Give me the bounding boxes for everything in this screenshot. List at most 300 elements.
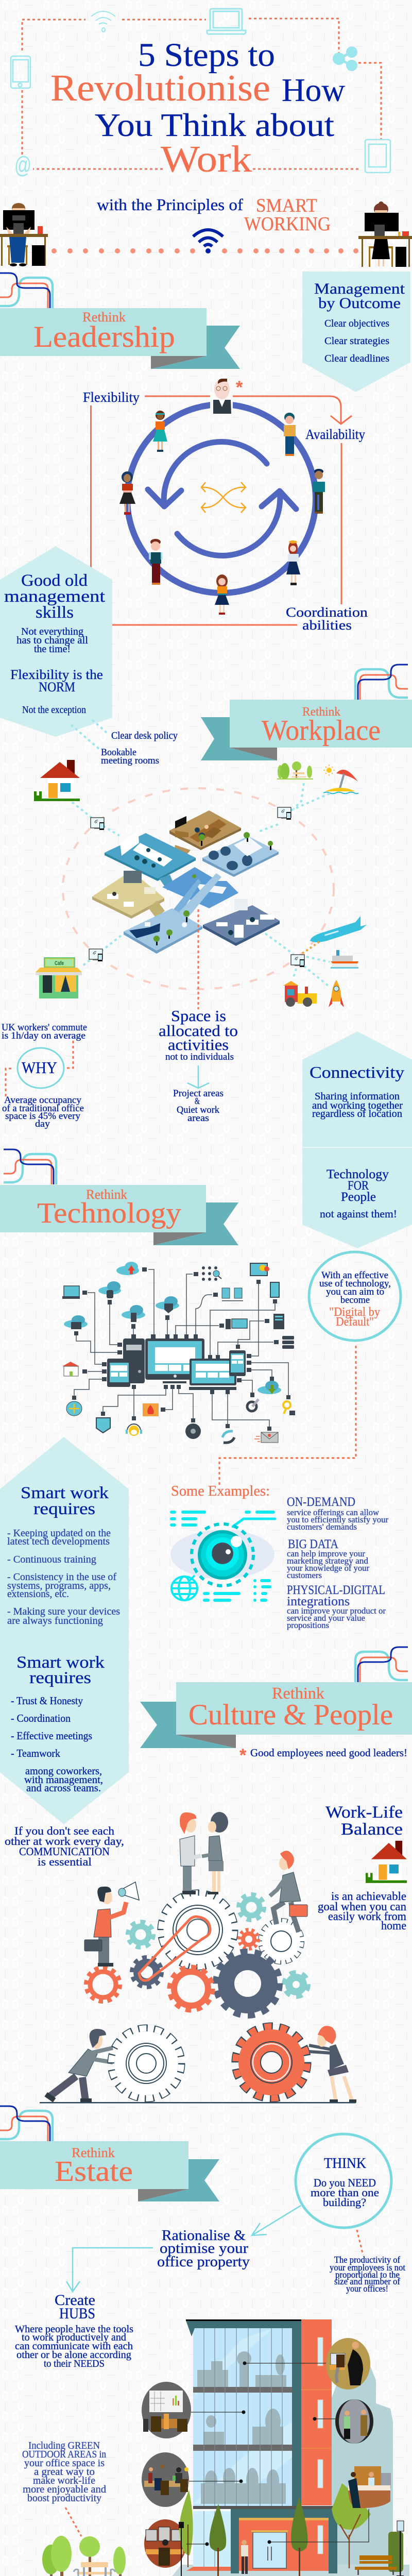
panel: smart work requires: and across teams. [26,1783,101,1794]
banner: Rethink Leadership: Rethink [82,310,126,325]
panel: good old management skills [0,546,112,737]
panel: connectivity: Technology [327,1167,389,1181]
panel: connectivity: and working together [312,1100,403,1111]
icon: small laptop [62,1286,80,1299]
icon: server stack [282,1336,294,1349]
examples text: ON-DEMAND [287,1495,355,1509]
icon: support headset [126,1424,142,1436]
text: green outdoor areas: more enjoyable and [23,2484,106,2495]
monitor node [291,955,304,967]
icon: wifi outline [91,11,115,32]
panel: smart work requires: Smart work [21,1484,109,1502]
text: green outdoor areas: make work-life [33,2475,95,2486]
leadership cycle diagram [83,378,368,633]
icon: monitor chat [250,1263,269,1276]
panel: smart work requires: requires [33,1500,95,1518]
banner: Rethink Technology [0,1185,238,1245]
scene: lift [335,2399,373,2444]
dashed connector to examples [219,1346,356,1485]
dashed ring around office [63,788,334,989]
text: green outdoor areas [22,2440,106,2504]
scene: security room [144,2519,186,2568]
text: create hubs: HUBS [59,2305,95,2322]
text: work-life balance: Work-Life [325,1803,403,1822]
decorative ribbon lines: technology [4,1149,56,1184]
team member: vest [149,539,162,585]
icon: search dots [202,1266,221,1281]
why circle: WHY [22,1058,57,1077]
labels [83,389,368,633]
icon: ship [331,950,358,969]
bench [74,2562,115,2576]
icon: cloud shield [156,1296,179,1313]
text: create hubs: Where people have the tools [15,2324,133,2335]
examples text: propositions [287,1620,329,1630]
dashed line from office to text [198,909,199,1009]
outer ring [127,404,316,593]
orange tower [301,2319,332,2505]
icon: toy train [283,981,317,1007]
icon: crossing arrows [201,482,246,513]
why connector [6,1041,73,1096]
examples text: service offerings can allow [287,1507,379,1517]
team member: red top [119,471,135,515]
text: achievable goal: goal when you can [318,1900,406,1913]
icon: cloud download [258,1381,281,1394]
header frame with device icons [11,9,390,178]
gear: pushed white [111,2028,181,2098]
panel: good old management skills: Not everything [21,626,83,637]
icon: phone right [270,1282,279,1297]
heading: space is allocated [159,1007,238,1062]
ground line [40,2102,356,2103]
banner: Rethink Estate: Estate [55,2156,133,2188]
team member: orange top [215,574,229,615]
arrow down [187,1065,209,1088]
panel: smart work requires: - Coordination [11,1712,71,1724]
labels: Availability [305,427,365,442]
gears illustration [40,1812,356,2103]
text: achievable goal [318,1890,406,1932]
decorative ribbon lines: culture [355,1647,408,1682]
heading: space is allocated: Space is [171,1007,226,1025]
panel: management by outcome [302,272,410,392]
heading: space is allocated: not to individuals [165,1052,234,1062]
oval: think: more than one [311,2186,379,2199]
activity list: Quiet work [177,1105,219,1115]
text: work-life balance [325,1803,403,1839]
text: communication: If you don't see each [14,1824,114,1837]
gear: pushed coral [235,2026,307,2098]
text: communication: is essential [38,1855,92,1868]
floor: lounge [202,832,279,877]
panel: smart work requires: - Continuous training [7,1554,96,1565]
icon: server [273,1314,284,1329]
text: green outdoor areas: boost productivity [27,2493,101,2504]
labels: abilities [302,618,352,633]
figure: pushing woman [309,2026,356,2103]
banner: Rethink Estate: Rethink [72,2145,115,2160]
labels: Flexibility [83,389,140,405]
note: good employees: Good employees need good leaders! [250,1747,407,1759]
cable plugs [72,1267,290,1431]
activity list [173,1088,224,1124]
panel: smart work requires: - Teamwork [11,1747,60,1759]
lamp posts [179,2521,404,2576]
text: productivity note [330,2255,405,2294]
inner rotation arrows [148,442,296,555]
text: achievable goal: is an achievable [331,1890,406,1903]
floor: central hall [162,867,238,920]
panel: management by outcome: by Outcome [318,295,401,312]
banner: Rethink Workplace: Workplace [262,715,381,747]
figure: handshake woman [202,1812,228,1894]
workplace notes [101,730,178,766]
commute fact: UK workers' commute [2,1022,87,1033]
tree: dark [210,2504,226,2551]
subtitle: SMART [256,195,317,216]
title: Work [161,138,252,180]
dashed connector [357,2230,363,2255]
dashed connector to park [65,2507,81,2536]
text: green outdoor areas: a great way to [34,2466,95,2478]
panel: connectivity: not against them! [320,1208,397,1220]
title: How [282,72,345,108]
monitor node [91,818,104,830]
office building illustration [142,2319,409,2576]
examples text: service and your value [287,1613,365,1623]
panel: smart work requires: - Making sure your devices [7,1606,120,1617]
floor bands [193,2387,292,2393]
back building [332,2366,393,2565]
gear: teal top right [238,1894,264,1920]
examples text: BIG DATA [288,1537,338,1551]
icon: park [277,761,313,779]
tablet [107,1359,130,1387]
icon: share [333,46,357,71]
oval: digital by default: "Digital by [329,1306,380,1319]
panel: smart work requires: latest tech developments [7,1536,110,1547]
banner: Rethink Workplace [201,700,412,760]
icon: cloud database [98,1281,121,1298]
oval: digital by default: you can aim to [326,1286,384,1297]
text: create hubs: can communicate with each [15,2341,133,2352]
connection dots with wifi icon [52,230,358,253]
right worker at desk [358,201,412,267]
tree: light right [332,2483,371,2530]
workplace notes: Bookable [101,747,136,758]
title: You Think about [95,107,334,143]
icon: shield swords [96,1418,110,1433]
panel: smart work requires [0,1437,129,1824]
text: create hubs [15,2292,133,2369]
heading: rationalise [157,2227,250,2270]
banner: Rethink Culture & People: Culture & People [188,1699,393,1731]
panel: management by outcome: Clear strategies [324,335,389,347]
icon: arrows globe [66,1401,82,1416]
lower glass [193,2511,231,2567]
icon: tech house [62,1362,79,1376]
subtitle: with the Principles of [97,195,243,214]
text: communication: COMMUNICATION [19,1845,110,1858]
icon: mail [254,1432,278,1443]
icon: cafe [36,957,82,998]
panel: connectivity: regardless of location [312,1108,402,1120]
text: productivity note: size and number of [334,2276,400,2286]
panel: connectivity: Connectivity [310,1063,404,1081]
icon: two phones [222,1288,243,1301]
icon: rocket [329,980,344,1007]
glass facade [193,2328,292,2506]
activity list: & [195,1096,200,1106]
gear: white right [261,1921,302,1962]
main monitor [145,1338,204,1383]
why circle [18,1048,64,1088]
panel: smart work requires: requires [29,1669,91,1687]
gear: large white [161,1893,234,1967]
text: create hubs: to work productively and [22,2332,126,2343]
icon: small pc [226,1319,247,1329]
panel: smart work requires: - Effective meetings [11,1730,92,1742]
panel: connectivity [302,1031,412,1248]
panel: good old management skills: skills [36,603,74,622]
icon: data eye [170,1511,275,1602]
text: achievable goal: home [381,1919,406,1932]
figure: climbing man [270,1851,307,1932]
text: productivity note: your offices! [346,2283,388,2294]
icon: cloud upload [116,1262,139,1275]
oval: think: Do you NEED [314,2176,376,2189]
icon: wifi [193,230,223,253]
title: Revolutionise [50,67,270,109]
examples text: customers [287,1570,322,1580]
panel: smart work requires: - Keeping updated on the [7,1528,111,1539]
gear: dark large [216,1952,280,2015]
trees [179,2483,403,2576]
floor: open desks [203,899,280,946]
banner: Rethink Technology: Technology [37,1197,181,1229]
entrance [231,2509,337,2573]
team member: yellow shirt [284,413,296,456]
icon: cloud phone [122,1305,145,1322]
heading: rationalise: Rationalise & [162,2227,246,2244]
examples text: marketing strategy and [287,1556,369,1566]
gear: coral small [239,1930,258,1948]
text: communication: other at work every day, [5,1835,124,1848]
text: green outdoor areas: OUTDOOR AREAS in [22,2449,106,2460]
park illustration [42,2536,126,2576]
title [50,37,345,180]
panel: smart work requires: Smart work [16,1653,105,1672]
icon: laptop [207,9,246,34]
pavement [169,2565,409,2576]
panel: connectivity: People [341,1190,376,1204]
panel: good old management skills: the time! [34,643,71,655]
left worker at desk [0,203,48,266]
dotted flight path [301,942,319,954]
isometric office floors [92,810,280,954]
panel: good old management skills: Good old [21,571,88,590]
floor: reception [124,908,202,954]
text: create hubs: to their NEEDS [44,2358,105,2369]
examples text: integrations [287,1595,350,1608]
monitor node [278,807,291,820]
text: work-life balance: Balance [341,1820,403,1839]
dotted connections [72,783,330,986]
heading: space is allocated: allocated to [159,1022,238,1040]
panel: connectivity: Sharing information [315,1091,400,1102]
workplace notes: meeting rooms [101,755,159,766]
icon: at sign: @ [14,151,31,178]
text: productivity note: proportional to the [335,2269,400,2280]
text: communication [5,1824,124,1868]
team member: teal shirt [313,469,325,514]
examples text: PHYSICAL-DIGITAL [287,1583,385,1597]
text: achievable goal: easily work from [328,1910,406,1923]
icon: key [283,1401,295,1415]
occupancy fact: day [35,1118,50,1129]
mullions [204,2328,282,2506]
examples text [287,1495,389,1630]
note: good employees: * [239,1745,247,1765]
figure: pushing man [44,2029,113,2103]
panel: management by outcome: Clear objectives [324,318,389,329]
note: good employees [239,1745,407,1765]
gear: coral left [86,1968,120,2002]
examples text: customers' demands [287,1522,357,1532]
occupancy fact: Average occupancy [4,1095,82,1106]
banner: Rethink Estate [0,2141,219,2201]
gear: coral bottom [169,1967,213,2010]
scene: presentation [142,2382,191,2438]
team member: navy skirt right [286,540,300,585]
oval: digital by default: become [340,1295,370,1306]
heading: some examples: Some Examples: [171,1483,270,1499]
heading: rationalise: optimise your [160,2240,248,2257]
scene: manager [326,2338,370,2389]
floor: conference room [105,831,196,881]
heading: space is allocated: activities [168,1036,229,1054]
text: productivity note: your employees is not [330,2262,405,2273]
banner: Rethink Leadership: Leadership [33,320,175,353]
icon: wrench gear [247,1399,259,1411]
leader figure [210,379,233,417]
oval: think [296,2134,391,2228]
occupancy fact: space is 45% every [5,1111,80,1122]
banner: Rethink Culture & People [140,1682,412,1748]
hedge [388,2532,403,2572]
panel: good old management skills: Not the exception [22,704,86,716]
bench [355,2555,397,2575]
figure: man with megaphone [84,1882,139,1967]
icon: cafe: Cafe [55,960,64,967]
icon: firewall [143,1403,159,1416]
oval: digital by default: use of technology, [319,1278,391,1289]
panel: connectivity: FOR [348,1179,369,1193]
globe [171,1575,197,1600]
team member: teal skirt [153,411,167,452]
banner: Rethink Culture & People: Rethink [272,1684,324,1702]
stairs down [159,875,175,890]
dashed connectors to workplace notes [71,720,107,750]
icon: disc [185,1423,201,1439]
gear: teal bottom right [284,1972,308,1997]
activity list: Project areas [173,1088,224,1099]
panel: smart work requires: extensions, etc. [7,1588,69,1600]
commute fact [2,1022,87,1041]
decorative ribbon lines: workplace [355,665,408,700]
icon: sync [222,1431,234,1443]
floor: cafe [92,871,165,919]
coral loop arrows [91,396,352,625]
panel: smart work requires: - Trust & Honesty [11,1694,83,1707]
oval: digital by default: Default" [336,1315,374,1329]
technology network diagram [62,1262,295,1443]
examples text: you to efficiently satisfy your [287,1515,389,1524]
panel: smart work requires: among coworkers, [25,1766,102,1777]
roof and column [186,2320,301,2507]
heading: rationalise: office property [157,2253,250,2270]
examples text: your knowledge of your [287,1563,369,1573]
text: create hubs: Create [55,2292,95,2309]
tree: light left [179,2490,193,2555]
phone [229,1350,246,1376]
title: 5 Steps to [138,37,275,74]
gear: dark small with belt [132,1917,210,1987]
floor: meeting room [169,810,241,859]
icon: plane [310,916,367,942]
occupancy fact [2,1095,84,1129]
text: green outdoor areas: your office space is [24,2458,105,2469]
tree: dark right [291,2497,308,2551]
icon: house [366,1841,407,1883]
panel: smart work requires: are always functioning [7,1615,103,1626]
icon: cloud monitor [64,1315,88,1329]
occupancy fact: of a traditional office [2,1103,84,1114]
banner: Rethink Technology: Rethink [86,1187,127,1202]
panel: smart work requires: with management, [24,1774,103,1786]
scene: team meeting [142,2452,189,2507]
monitor node [89,949,102,961]
commute fact: is 1h/day on average [2,1030,85,1041]
arrow: rationalise to hubs [66,2248,153,2292]
reception desk [348,2466,391,2508]
text: create hubs: other or be alone according [16,2349,131,2361]
subtitle: WORKING [244,213,331,235]
figure: handshake man [180,1812,201,1894]
subtitle [97,195,331,235]
guard [241,2540,248,2574]
laptop [189,1359,236,1390]
activity list: areas [187,1113,209,1124]
panel: smart work requires: - Consistency in the use of [7,1571,116,1583]
panel: management by outcome: Clear deadlines [324,353,389,364]
banner: Rethink Workplace: Rethink [302,705,340,719]
silhouettes [197,2351,286,2504]
text: green outdoor areas: Including GREEN [28,2440,100,2451]
examples text: can improve your product or [287,1606,386,1616]
labels: Coordination [286,605,368,620]
oval: think: THINK [324,2156,366,2172]
decorative ribbon lines: estate [0,2106,53,2141]
panel: good old management skills: management [4,587,105,606]
panel: smart work requires: systems, programs, apps, [7,1580,111,1591]
computer tower [123,1338,145,1383]
oval: think: building? [323,2196,366,2209]
icon: house [34,760,80,801]
workplace notes: Clear desk policy [111,730,178,741]
text: productivity note: The productivity of [334,2255,400,2265]
